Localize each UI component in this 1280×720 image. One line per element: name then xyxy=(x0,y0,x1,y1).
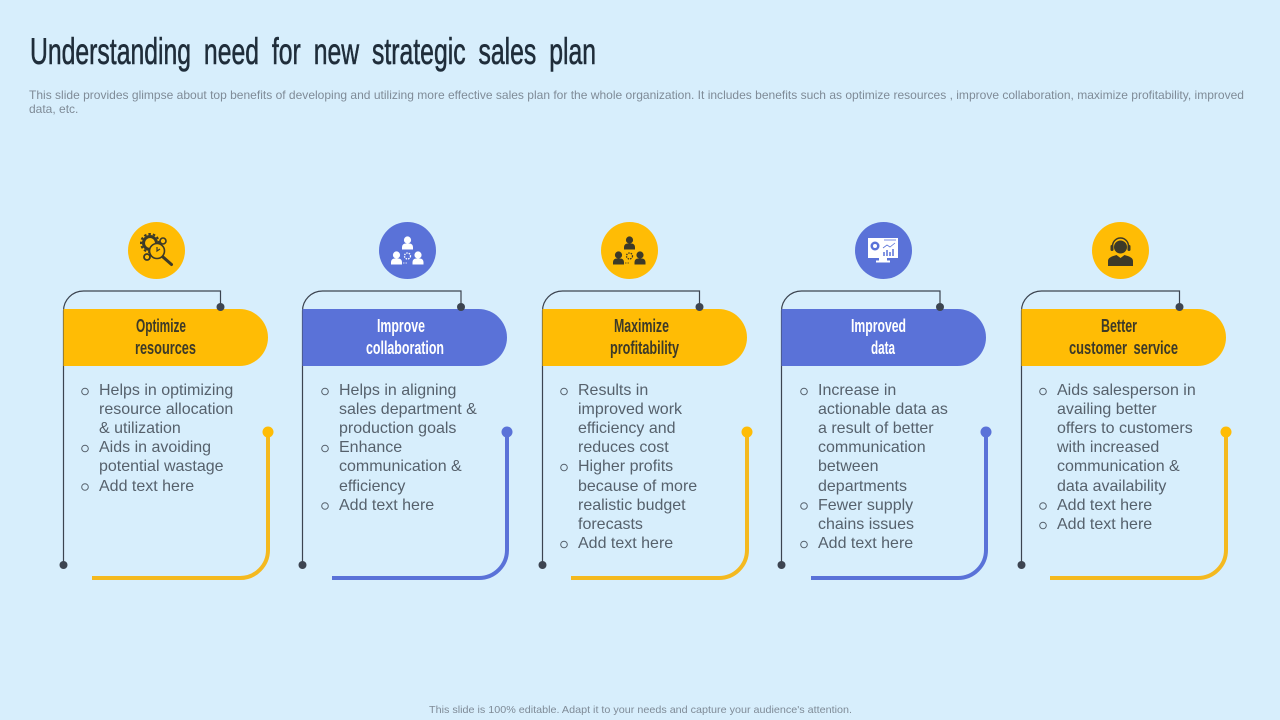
bullet list: Helps in optimizing xyxy=(99,382,233,399)
heading banner: Optimize xyxy=(136,316,186,336)
heading banner: Maximize xyxy=(614,316,669,336)
bullet list: Add text here xyxy=(99,478,194,495)
title: Understanding need for new strategic sales plan xyxy=(30,31,596,72)
panel: optimize resources xyxy=(60,222,274,578)
heading banner: collaboration xyxy=(366,338,444,358)
bullet list: Higher profits xyxy=(578,458,673,475)
bullet list: actionable data as xyxy=(818,401,948,418)
bullet list: a result of better xyxy=(818,420,934,437)
bullet list: forecasts xyxy=(578,516,643,533)
accent line xyxy=(1050,426,1232,578)
connector: top and left line xyxy=(778,291,940,569)
bullet list xyxy=(322,382,477,514)
bullet list: with increased xyxy=(1056,439,1159,456)
bullet list: Helps in aligning xyxy=(339,382,456,399)
subtitle description: This slide provides glimpse about top benefits of developing and utilizing more effective sales plan for the whole organization. It includes benefits such as optimize resources , improve collaboration, maximize profitability, improved xyxy=(29,88,1244,102)
heading banner xyxy=(64,309,268,366)
bullet list: sales department & xyxy=(339,401,477,418)
bullet list xyxy=(801,382,948,552)
bullet list: Add text here xyxy=(339,497,434,514)
bullet list: Add text here xyxy=(578,535,673,552)
heading banner: profitability xyxy=(610,338,679,358)
bullet list: reduces cost xyxy=(578,439,669,456)
subtitle description: data, etc. xyxy=(29,102,78,116)
bullet list: availing better xyxy=(1057,401,1157,418)
heading banner: customer service xyxy=(1069,338,1178,358)
panel: improved data xyxy=(778,222,992,578)
icon: team with gear xyxy=(601,222,658,279)
bullet list: & utilization xyxy=(99,420,181,437)
bullet list: production goals xyxy=(339,420,456,437)
accent line xyxy=(571,426,752,578)
bullet list: communication & xyxy=(339,458,462,475)
connector: top and left line xyxy=(538,291,700,569)
connector: top and left line xyxy=(1018,291,1180,569)
bullet list: Aids in avoiding xyxy=(99,439,211,456)
bullet list: between xyxy=(818,458,878,475)
heading banner: Improved xyxy=(851,316,906,336)
bullet list: Aids salesperson in xyxy=(1057,382,1196,399)
bullet list: Add text here xyxy=(1057,516,1152,533)
bullet list: Fewer supply xyxy=(818,497,913,514)
accent line xyxy=(92,426,274,578)
bullet list: realistic budget xyxy=(578,497,686,514)
icon: team with gear xyxy=(379,222,436,279)
icon: gears and magnifier xyxy=(128,222,185,279)
bullet list: departments xyxy=(818,478,907,495)
accent line xyxy=(332,426,512,578)
bullet list: efficiency and xyxy=(578,420,676,437)
connector: top and left line xyxy=(60,291,220,569)
heading banner xyxy=(302,309,507,366)
bullet list: communication & xyxy=(1057,458,1180,475)
heading banner: resources xyxy=(135,338,196,358)
bullet list: Add text here xyxy=(1057,497,1152,514)
connector: top and left line xyxy=(298,291,461,569)
panel: improve collaboration xyxy=(298,222,512,578)
bullet list: data availability xyxy=(1057,478,1166,495)
bullet list: because of more xyxy=(578,478,697,495)
panel: maximize profitability xyxy=(538,222,752,578)
bullet list: communication xyxy=(818,439,926,456)
bullet list xyxy=(82,382,233,495)
heading banner xyxy=(1022,309,1226,366)
bullet list: chains issues xyxy=(818,516,914,533)
accent line xyxy=(811,426,992,578)
icon: analytics monitor xyxy=(855,222,912,279)
heading banner: Better xyxy=(1101,316,1137,336)
panel: better customer service xyxy=(1018,222,1232,578)
footer note: This slide is 100% editable. Adapt it to your needs and capture your audience's attention. xyxy=(429,704,852,716)
bullet list xyxy=(561,382,697,552)
heading banner: Improve xyxy=(377,316,425,336)
icon: headset agent xyxy=(1092,222,1149,279)
bullet list: Increase in xyxy=(818,382,896,399)
bullet list: improved work xyxy=(578,401,683,418)
bullet list: resource allocation xyxy=(99,401,233,418)
bullet list: offers to customers xyxy=(1057,420,1193,437)
bullet list: Add text here xyxy=(818,535,913,552)
bullet list: potential wastage xyxy=(99,458,224,475)
bullet list: efficiency xyxy=(339,478,405,495)
bullet list: Results in xyxy=(578,382,648,399)
bullet list: Enhance xyxy=(339,439,402,456)
heading banner xyxy=(782,309,986,366)
heading banner xyxy=(542,309,747,366)
heading banner: data xyxy=(871,338,896,358)
bullet list xyxy=(1040,382,1196,533)
